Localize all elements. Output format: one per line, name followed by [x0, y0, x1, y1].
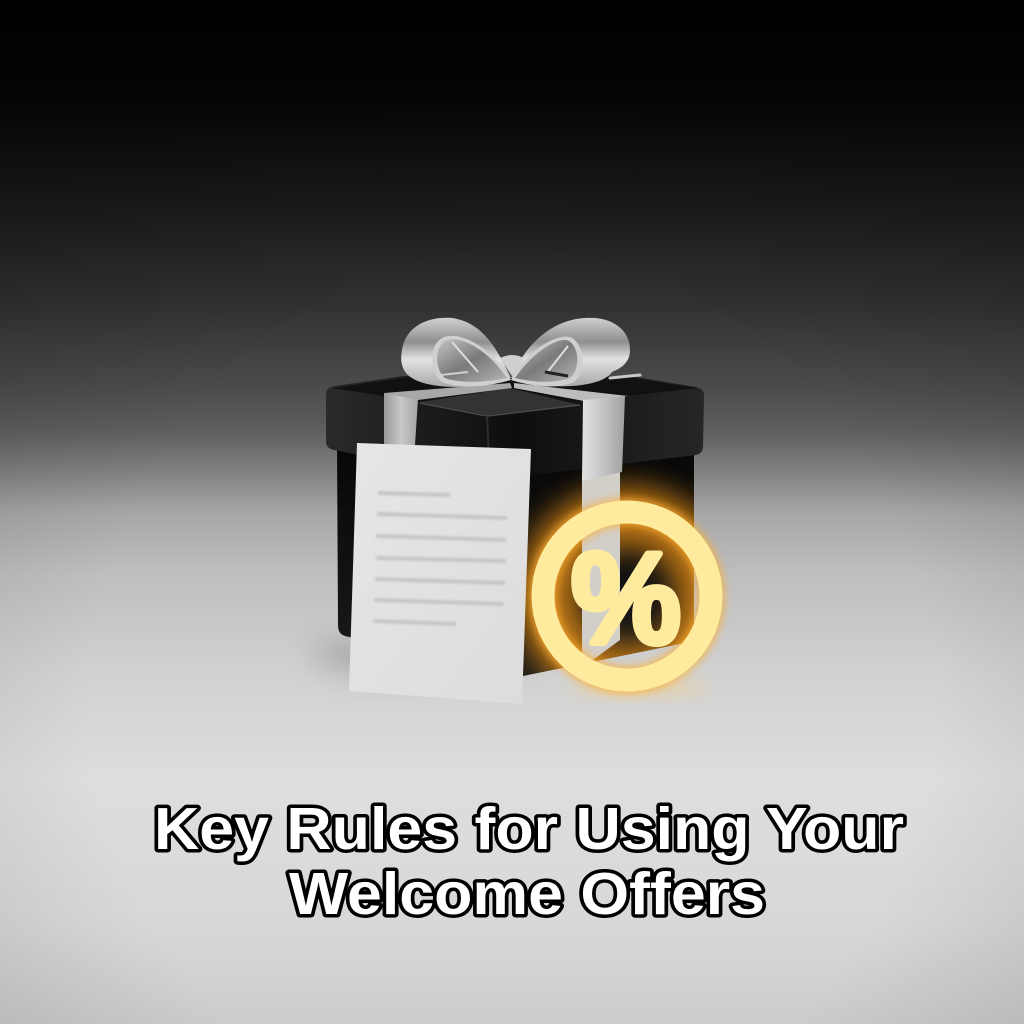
lower ribbon strip [582, 470, 620, 664]
gift box [326, 318, 707, 676]
left bow loop [401, 318, 511, 387]
title: Welcome Offers [289, 861, 765, 927]
percent sign: % [571, 525, 681, 671]
bow knot [500, 355, 524, 376]
lid top face highlight [420, 388, 580, 415]
box lid [326, 376, 704, 480]
title: Key Rules for Using Your [154, 796, 904, 862]
orange glow on box [547, 516, 707, 676]
ribbon bow [401, 318, 640, 387]
floor shadow under gift [310, 633, 530, 677]
title [154, 796, 904, 927]
right bow loop [511, 318, 630, 386]
document card [349, 443, 531, 704]
glowing percent icon [543, 512, 711, 696]
box body [337, 440, 694, 676]
document text lines [373, 491, 507, 626]
ribbon bands [384, 383, 628, 481]
